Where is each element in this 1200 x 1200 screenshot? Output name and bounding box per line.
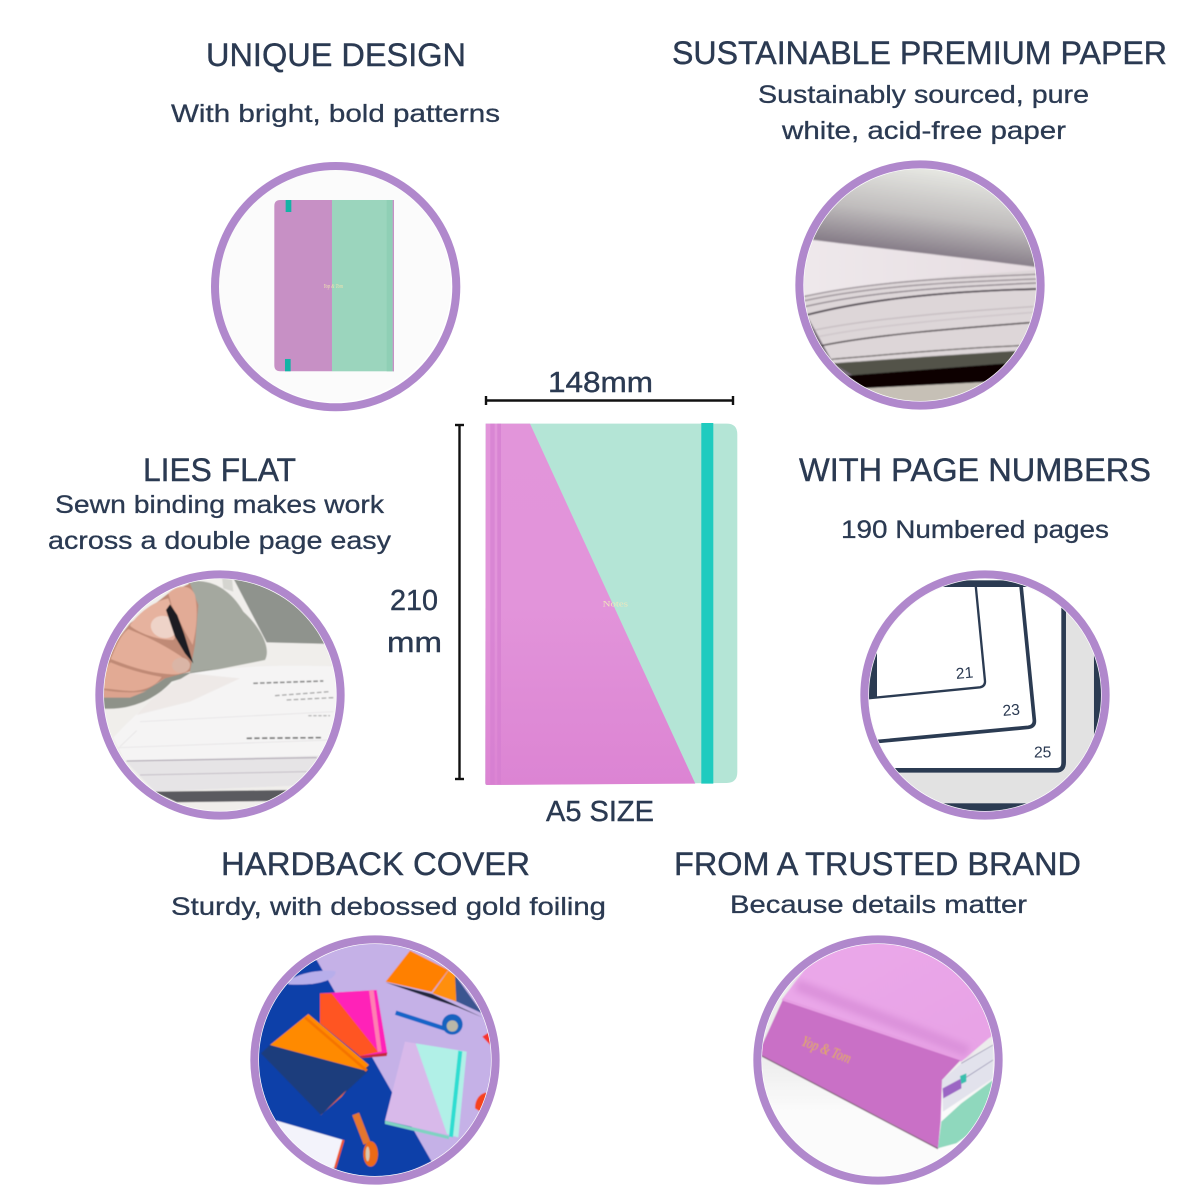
text: sustainably sourced: white, acid-free paper (781, 117, 1066, 145)
icon: page numbers circle (855, 565, 1115, 825)
label: 210 mm height: 210 (390, 585, 438, 617)
heading: sustainable premium paper: SUSTAINABLE PREMIUM PAPER (672, 35, 1167, 71)
label: 210 mm height: mm (387, 627, 442, 659)
text: sewn binding (48, 491, 392, 555)
icon: notebook photo circle: Yop & Tom (324, 283, 343, 290)
heading: with page numbers: WITH PAGE NUMBERS (799, 452, 1151, 488)
heading: hardback cover: HARDBACK COVER (221, 846, 530, 882)
text: sustainably sourced: Sustainably sourced, pure (758, 81, 1089, 109)
heading: lies flat: LIES FLAT (143, 452, 296, 488)
icon: notebook spine circle: Yop & Tom (799, 1033, 854, 1067)
notebook: central A5 cover (485, 423, 737, 785)
icon: page numbers circle: 21 (955, 665, 974, 683)
label: 210 mm height (387, 585, 442, 659)
text: sewn binding: Sewn binding makes work (55, 491, 385, 519)
heading: from a trusted brand: FROM A TRUSTED BRAND (674, 846, 1081, 882)
icon: notebook spine circle (748, 930, 1008, 1190)
text: because details matter: Because details matter (730, 891, 1027, 919)
icon: paper photo circle (790, 155, 1050, 415)
label: 148mm width: 148mm (548, 367, 653, 399)
text: sturdy: Sturdy, with debossed gold foiling (171, 893, 606, 921)
icon: notebooks flatlay circle (245, 930, 505, 1190)
arrow: height dimension (455, 425, 464, 779)
text: sewn binding: across a double page easy (48, 527, 392, 555)
notebook: central A5 cover: Notes (603, 599, 629, 609)
arrow: width dimension (486, 396, 733, 405)
text: with bright, bold patterns: With bright, bold patterns (171, 100, 500, 128)
icon: notebook photo circle (205, 156, 465, 416)
icon: page numbers circle: 25 (1034, 745, 1052, 762)
label: A5 size: A5 SIZE (546, 796, 654, 828)
text: 190 numbered pages: 190 Numbered pages (841, 516, 1109, 544)
icon: page numbers circle: 23 (1002, 701, 1021, 720)
text: sustainably sourced (758, 81, 1089, 145)
heading: unique design: UNIQUE DESIGN (206, 37, 466, 73)
icon: writing photo circle (90, 565, 350, 825)
